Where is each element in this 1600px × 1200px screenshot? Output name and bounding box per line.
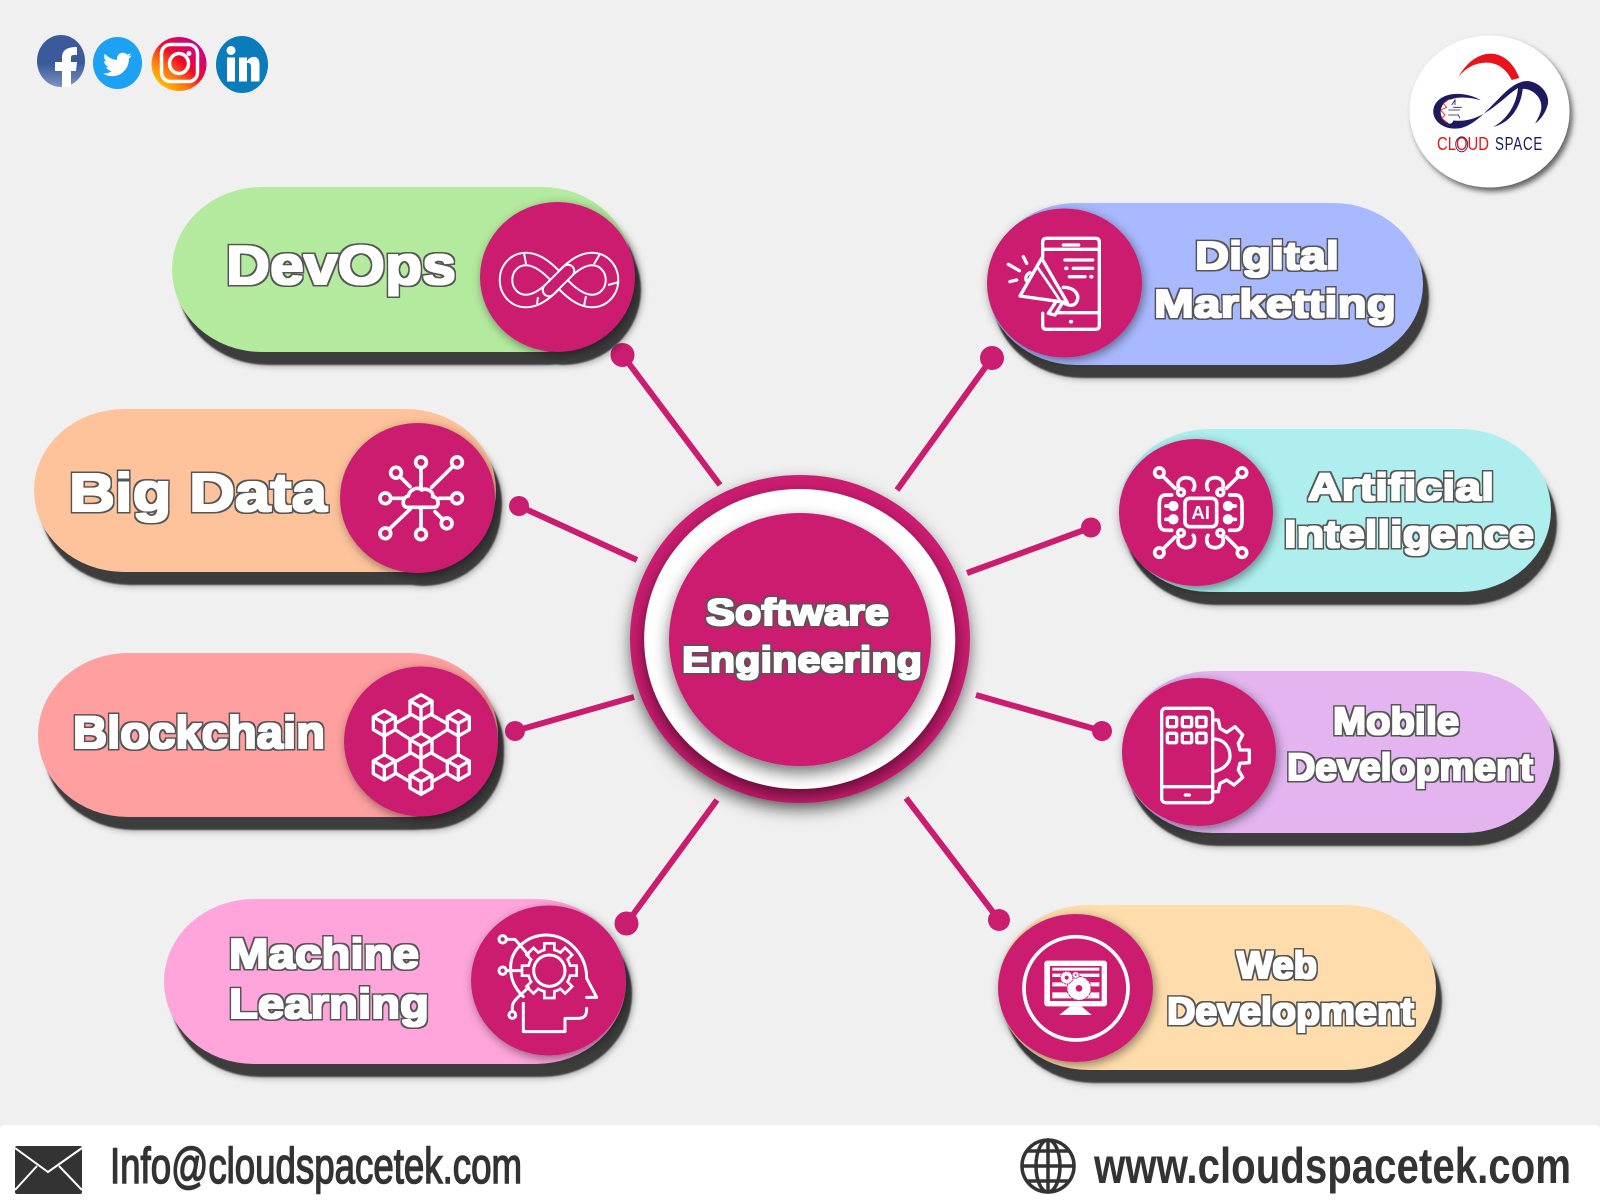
pill (38, 653, 498, 817)
icon disc (1122, 678, 1276, 826)
footer background (0, 1125, 1600, 1200)
heading line 1: Artificial (1308, 467, 1494, 509)
panel: DevOps (172, 187, 641, 365)
heading: DevOps (226, 234, 456, 296)
heading line 2: Development (1167, 991, 1414, 1033)
icon: head with gear (499, 935, 597, 1032)
icon: cloud network (380, 457, 462, 540)
connector: Big Data (509, 496, 637, 560)
pill shadow (40, 422, 502, 586)
heading: Blockchain (73, 707, 325, 758)
panel: Artificial Intelligence (1119, 429, 1557, 605)
logo: Cloud Space (1410, 36, 1570, 188)
heading line 1: Machine (229, 930, 419, 977)
icon disc (480, 202, 635, 352)
heading (1154, 235, 1396, 326)
connector: Mobile Development (976, 695, 1112, 741)
connector: Machine Learning (614, 800, 717, 936)
icon: block cubes (373, 695, 469, 794)
icon: AI chip brain (1155, 468, 1247, 557)
panel: Digital Marketting (987, 203, 1429, 378)
pill shadow (993, 216, 1429, 378)
heading (1284, 467, 1534, 556)
pill shadow (178, 200, 641, 365)
logo text: cloud: CLOUD (1437, 134, 1489, 154)
icon disc (471, 906, 626, 1056)
pill shadow (1125, 442, 1557, 605)
icon: phone with gear (1162, 708, 1249, 803)
social media icons (37, 35, 268, 93)
logo badge (1410, 36, 1570, 188)
heading line 2: Marketting (1154, 283, 1396, 326)
pill (164, 899, 626, 1064)
icon: globe (1022, 1140, 1074, 1192)
footer bar (0, 1125, 1600, 1200)
icon disc (998, 914, 1153, 1062)
heading (1167, 945, 1414, 1033)
connector: Web Development (906, 798, 1010, 931)
heading line 2: Learning (229, 980, 429, 1027)
icon: monitor with gears (1024, 937, 1128, 1040)
heading (1287, 701, 1533, 789)
pill (998, 905, 1436, 1070)
hub title line 2: Engineering (682, 639, 922, 680)
panel: Machine Learning (164, 899, 632, 1077)
panel: Web Development (998, 905, 1442, 1083)
pill (34, 409, 496, 572)
logo mark (1433, 54, 1548, 129)
pill shadow (44, 666, 504, 830)
heading line 1: Digital (1195, 235, 1339, 278)
icon: phone with megaphone (1008, 238, 1099, 329)
pill shadow (1004, 918, 1442, 1083)
icon disc (1119, 439, 1273, 586)
hub inner disc (669, 513, 931, 766)
icon: instagram (152, 37, 206, 91)
pill (1119, 429, 1551, 592)
heading line 1: Mobile (1333, 701, 1459, 743)
logo text: space: SPACE (1495, 134, 1543, 154)
hub outer ring (630, 475, 970, 803)
heading line 2: Intelligence (1284, 514, 1534, 556)
icon disc (344, 666, 498, 816)
icon disc (340, 423, 495, 573)
icon: envelope (15, 1146, 82, 1194)
connector: Artificial Intelligence (967, 518, 1101, 573)
logo O ring (1456, 137, 1468, 152)
pill (172, 187, 632, 352)
pill (987, 203, 1423, 365)
icon: facebook (37, 35, 85, 87)
pill shadow (1128, 684, 1560, 846)
heading: Big Data (69, 463, 328, 523)
email address: Info@cloudspacetek.com (110, 1138, 522, 1194)
panel: Blockchain (38, 653, 504, 830)
heading (229, 930, 429, 1027)
pill shadow (170, 912, 632, 1077)
heading line 1: Web (1237, 945, 1317, 987)
icon: AI chip brain: AI (1191, 502, 1210, 523)
heading line 2: Development (1287, 747, 1533, 789)
icon: linkedin (216, 36, 268, 93)
icon disc (987, 208, 1142, 358)
panel: Big Data (34, 409, 502, 586)
icon: infinity (506, 253, 619, 306)
panel: Mobile Development (1122, 671, 1560, 846)
connector: Digital Marketting (897, 346, 1004, 490)
connector: DevOps (610, 343, 720, 485)
hub white ring (644, 489, 955, 789)
hub title line 1: Software (706, 592, 889, 633)
center hub: Software Engineering (630, 475, 970, 803)
pill (1122, 671, 1554, 833)
connector: Blockchain (505, 697, 634, 741)
icon: twitter (93, 37, 142, 89)
